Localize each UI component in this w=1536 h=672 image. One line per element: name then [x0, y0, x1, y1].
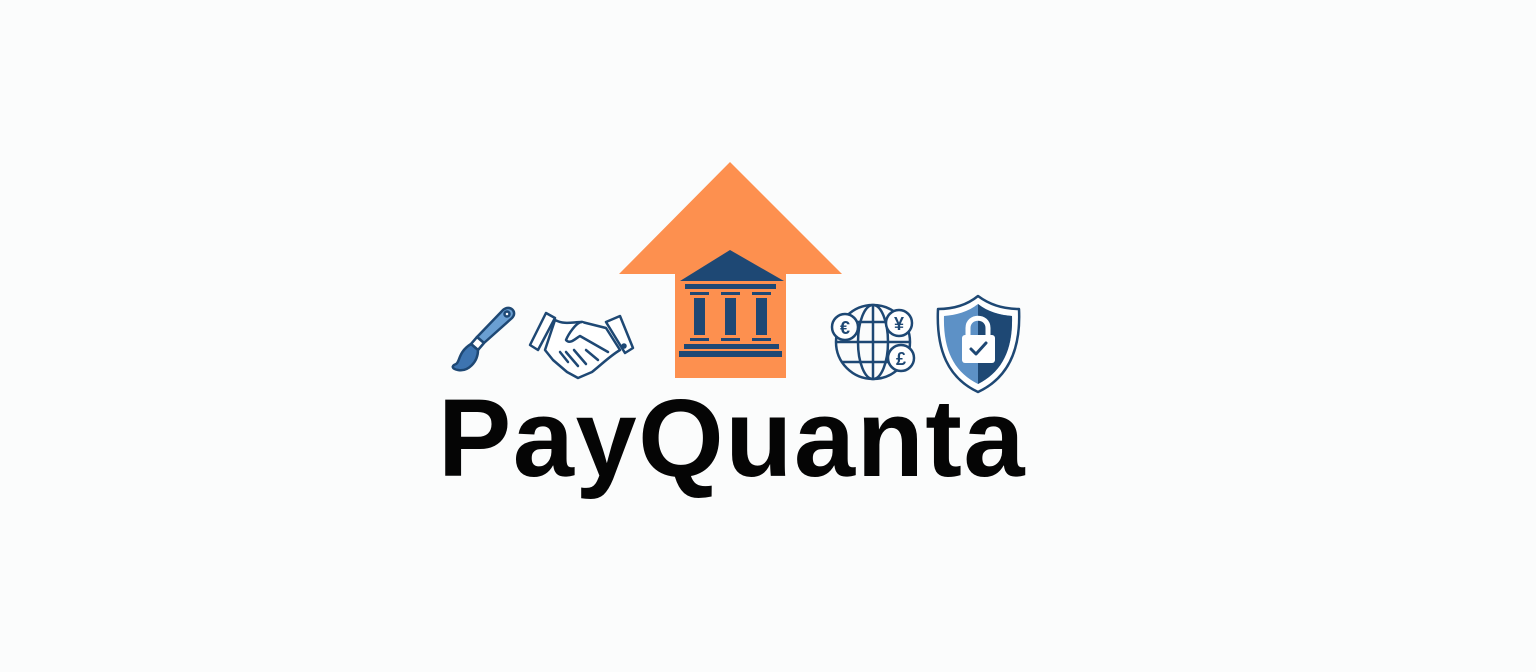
coin: euro: € [840, 318, 850, 338]
coin: pound: £ [896, 349, 906, 369]
coin: yen: ¥ [894, 314, 904, 334]
icon: orange up arrow with bank [619, 162, 842, 378]
icon: shield with padlock [938, 296, 1019, 392]
icon: handshake [530, 313, 633, 378]
icon: bank building [679, 250, 784, 357]
icon: globe with currencies [832, 305, 914, 379]
icon: paintbrush [453, 308, 514, 370]
title: PayQuanta: PayQuanta [438, 377, 1026, 500]
